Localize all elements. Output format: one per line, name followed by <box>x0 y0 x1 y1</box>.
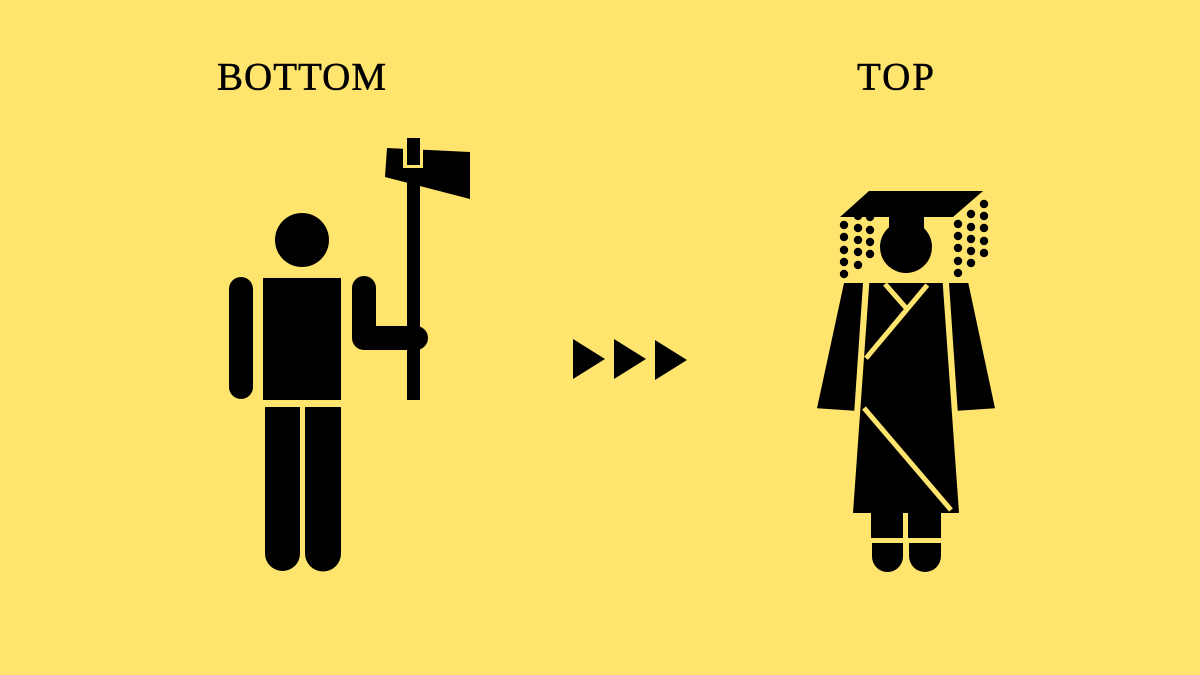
left foot <box>872 543 903 572</box>
figure: worker with axe <box>229 138 470 572</box>
mortarboard cap <box>840 191 983 233</box>
figure: scholar in robe <box>817 191 995 572</box>
right leg <box>305 407 341 572</box>
right sleeve <box>949 283 995 411</box>
right foot <box>909 543 941 572</box>
hair beads: right <box>954 200 988 277</box>
raised arm <box>352 276 428 350</box>
torso <box>263 278 341 400</box>
arrows: progression <box>573 339 687 380</box>
left leg <box>265 407 300 571</box>
left leg <box>871 513 903 538</box>
left sleeve <box>817 283 863 411</box>
heading: top: TOP <box>857 56 934 98</box>
heading: bottom: BOTTOM <box>217 56 386 98</box>
right leg <box>908 513 941 538</box>
left arm <box>229 277 253 399</box>
head <box>275 213 329 267</box>
head <box>880 221 932 273</box>
hair beads: left <box>840 212 874 278</box>
icon: axe <box>385 138 470 400</box>
robe body <box>853 283 959 513</box>
